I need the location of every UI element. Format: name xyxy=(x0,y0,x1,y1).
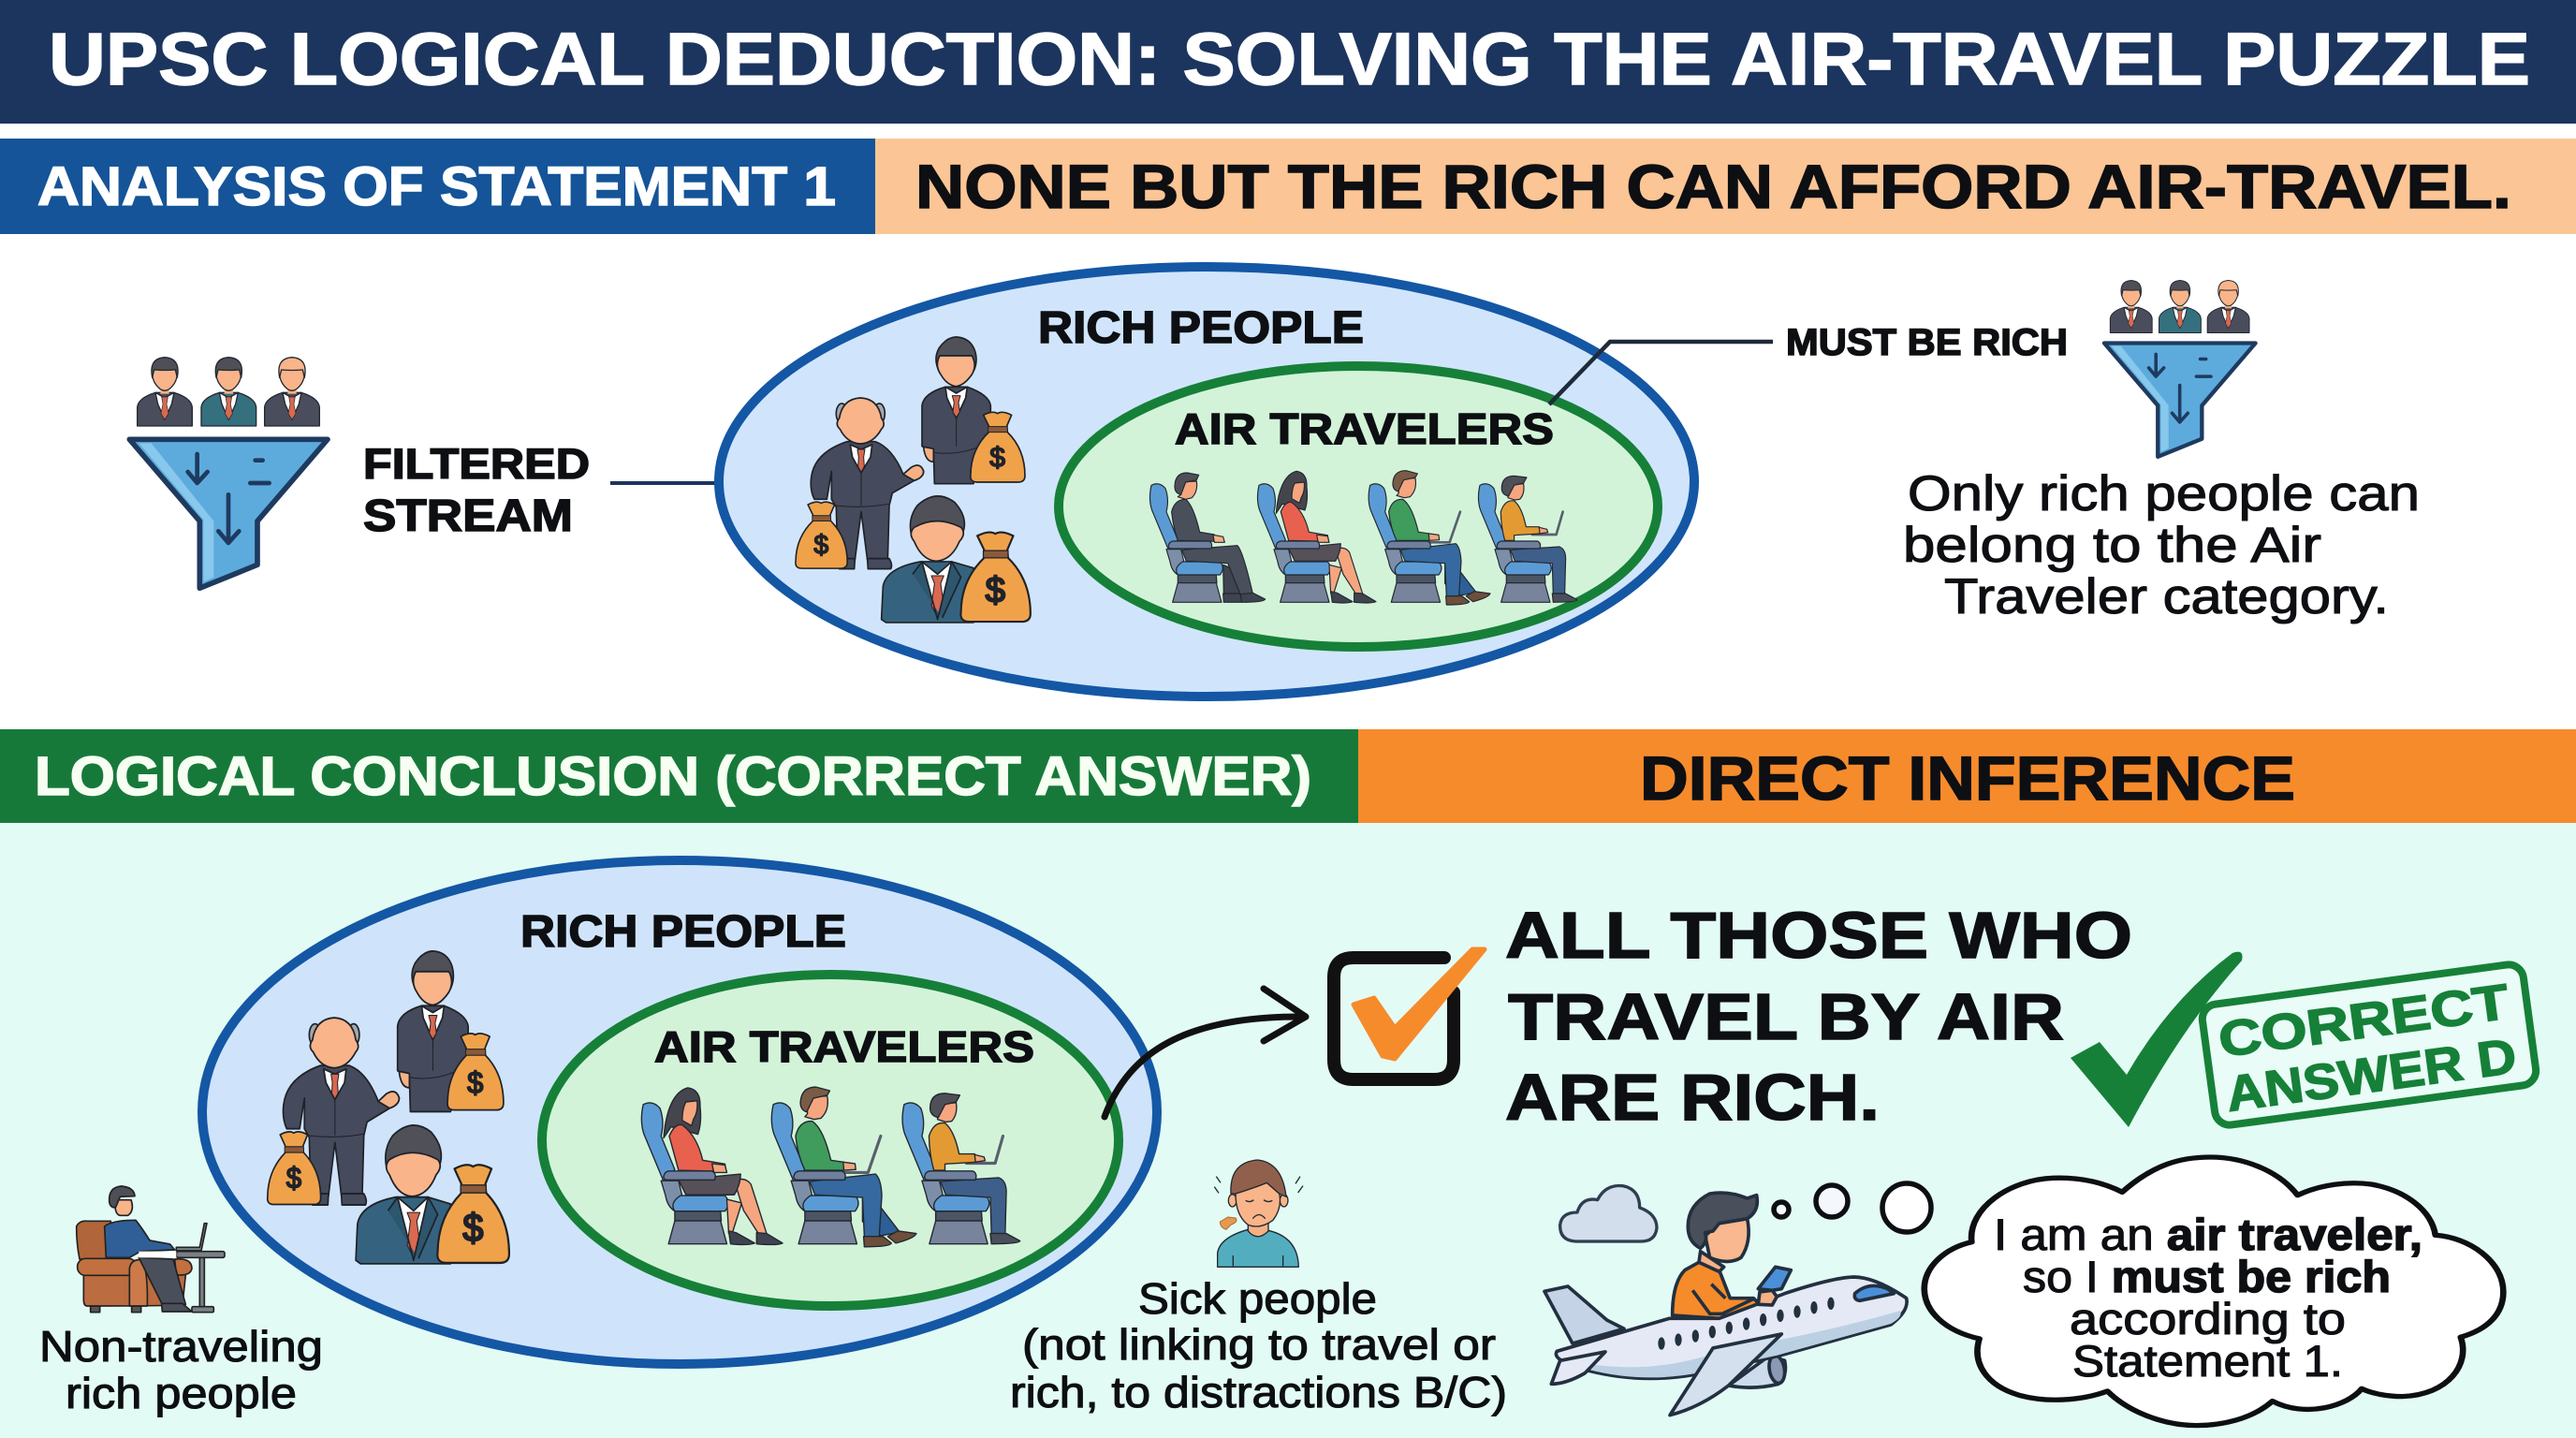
seated passengers xyxy=(1149,471,1577,605)
icon: left funnel with three people xyxy=(129,358,328,588)
thought cloud text: according to xyxy=(2070,1294,2346,1343)
explanation text: belong to the Air xyxy=(1903,518,2321,573)
section header: direct inference: DIRECT INFERENCE xyxy=(1640,743,2295,813)
air travelers label: AIR TRAVELERS xyxy=(654,1022,1034,1071)
conclusion statement: TRAVEL BY AIR xyxy=(1508,980,2064,1053)
label: non-traveling rich people xyxy=(39,1322,323,1417)
icon: green check mark xyxy=(2071,952,2243,1127)
connector: filtered stream to diagram xyxy=(610,481,717,485)
stamp: correct answer d xyxy=(2201,962,2538,1127)
icon: man riding airplane xyxy=(1544,1193,1907,1416)
conclusion statement: ALL THOSE WHO xyxy=(1505,899,2132,972)
conclusion statement: ARE RICH. xyxy=(1505,1061,1880,1134)
label: sick people: Sick people xyxy=(1138,1274,1377,1323)
label: filtered stream: STREAM xyxy=(363,492,573,541)
thought cloud text: I am an air traveler, xyxy=(1994,1210,2422,1259)
statement banner: NONE BUT THE RICH CAN AFFORD AIR-TRAVEL. xyxy=(915,152,2511,221)
statement banner xyxy=(875,139,2576,234)
thought cloud xyxy=(1925,1157,2503,1426)
seated passengers xyxy=(641,1087,1020,1247)
explanation text xyxy=(1903,466,2420,624)
label: non-traveling rich people: rich people xyxy=(66,1369,297,1417)
icon: non-traveling rich person in armchair xyxy=(77,1186,225,1313)
section header: analysis of statement 1: ANALYSIS OF STATEMENT 1 xyxy=(37,156,836,217)
label: filtered stream: FILTERED xyxy=(363,440,590,488)
section header: logical conclusion xyxy=(0,729,1358,823)
venn diagram: statement 1 xyxy=(719,267,1694,697)
stamp: correct answer d: CORRECT xyxy=(2216,975,2512,1068)
air travelers circle xyxy=(542,975,1119,1306)
section header: direct inference xyxy=(1358,729,2576,823)
label: filtered stream xyxy=(363,440,590,541)
thought cloud text: so I must be rich xyxy=(2023,1252,2391,1301)
air travelers label: AIR TRAVELERS xyxy=(1175,404,1554,453)
label: sick people xyxy=(1010,1274,1507,1416)
thought cloud text: Statement 1. xyxy=(2072,1336,2343,1386)
label: non-traveling rich people: Non-traveling xyxy=(39,1322,323,1371)
rich people group xyxy=(796,337,1031,623)
stamp: correct answer d: ANSWER D xyxy=(2223,1029,2520,1123)
thought cloud text xyxy=(1994,1210,2422,1386)
icon: small cloud xyxy=(1560,1186,1657,1241)
rich people label: RICH PEOPLE xyxy=(1038,303,1364,353)
explanation text: Traveler category. xyxy=(1944,569,2389,624)
panel: conclusion background xyxy=(0,823,2576,1438)
label: sick people: (not linking to travel or xyxy=(1022,1320,1496,1369)
icon: right funnel with three people xyxy=(2104,281,2256,457)
explanation text: Only rich people can xyxy=(1908,466,2420,521)
thought bubbles xyxy=(1774,1183,1931,1232)
rich people group xyxy=(268,951,509,1264)
label: sick people: rich, to distractions B/C) xyxy=(1010,1368,1507,1416)
label: must be rich: MUST BE RICH xyxy=(1786,322,2068,363)
section header: analysis of statement 1 xyxy=(0,139,875,234)
title bar: UPSC LOGICAL DEDUCTION: SOLVING THE AIR-TRAVEL PUZZLE xyxy=(49,17,2530,100)
leader line: must be rich xyxy=(1549,342,1773,404)
icon: sick person xyxy=(1214,1160,1303,1267)
conclusion statement xyxy=(1505,899,2132,1134)
title bar xyxy=(0,0,2576,124)
venn diagram: conclusion xyxy=(202,860,1157,1364)
section header: logical conclusion: LOGICAL CONCLUSION (CORRECT ANSWER) xyxy=(35,746,1311,807)
air travelers circle xyxy=(1059,366,1658,647)
icon: orange check in box xyxy=(1334,949,1485,1079)
rich people label: RICH PEOPLE xyxy=(520,907,846,957)
arrow: to conclusion xyxy=(1105,989,1306,1117)
